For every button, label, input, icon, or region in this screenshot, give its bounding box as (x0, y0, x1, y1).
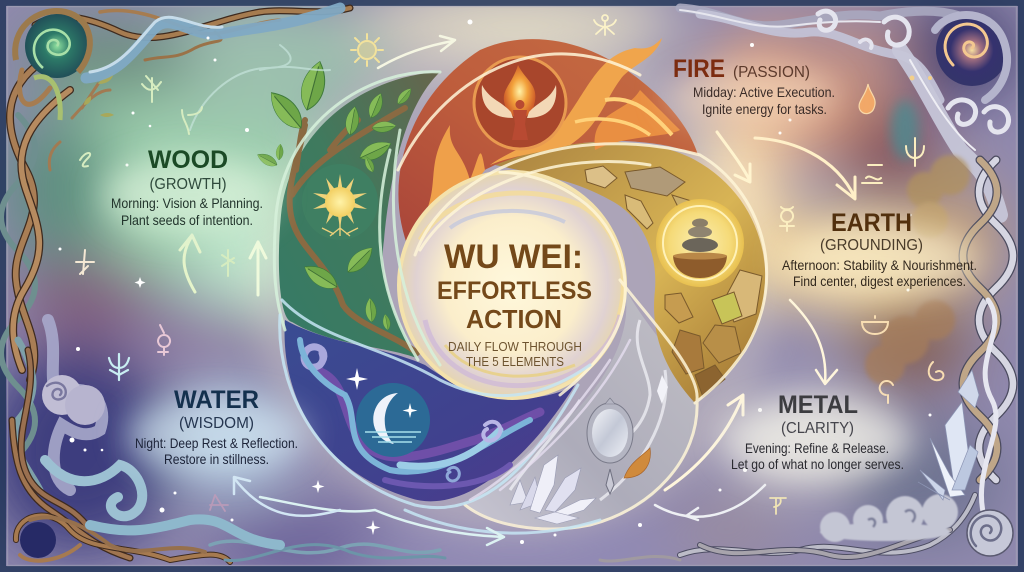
wood description (111, 195, 263, 228)
stars (58, 20, 932, 544)
cloud and wave, left side (42, 320, 280, 545)
metal wisps (510, 320, 666, 500)
clouds, bottom right (820, 494, 958, 542)
arrow: lower right wisp (655, 485, 765, 520)
border: top-left vine and blue ribbon (20, 8, 350, 104)
border: brown and blue vine braid, left side (1, 60, 130, 558)
icon: crystal cluster (510, 455, 596, 524)
label: earth (782, 209, 977, 289)
icon: stacked stones in bowl (656, 199, 744, 287)
wood subtitle: (GROWTH) (150, 176, 226, 193)
center subtitle (448, 340, 582, 369)
water description: Night: Deep Rest & Reflection. (135, 435, 298, 451)
flowing light ribbons (274, 54, 767, 533)
label: metal (731, 391, 904, 472)
water swirl ribbons (300, 340, 540, 486)
border: bottom-left spiral and brown braid (16, 516, 680, 562)
center swirl disc (399, 172, 625, 398)
arrow: metal to earth (665, 395, 743, 490)
wood description: Plant seeds of intention. (121, 212, 253, 228)
earth description: Afternoon: Stability & Nourishment. (782, 257, 977, 273)
panel: metal petal (465, 282, 697, 528)
water subtitle: (WISDOM) (179, 415, 254, 432)
rune: flame (859, 84, 875, 114)
metal description (731, 440, 904, 472)
fire description: Ignite energy for tasks. (702, 101, 827, 117)
metal description: Evening: Refine & Release. (745, 440, 889, 456)
arrow: metal to water bottom (260, 497, 504, 545)
arrow: fire to earth near disc (717, 132, 750, 182)
wood heading: WOOD (148, 146, 228, 174)
leaves on tree (255, 59, 414, 331)
metal heading: METAL (778, 391, 858, 419)
icon: falling leaf (624, 448, 650, 478)
label: wood (111, 146, 263, 228)
panel: wood petal (255, 59, 440, 358)
icon: sun medallion (302, 164, 378, 240)
center subtitle: THE 5 ELEMENTS (466, 355, 564, 369)
water heading: WATER (174, 386, 259, 414)
title line three: ACTION (466, 304, 562, 334)
border: grey and tan braid, right side (963, 160, 1013, 520)
panel: earth petal (495, 142, 765, 402)
panel: fire petal (398, 38, 698, 252)
arrow: earth to metal (790, 300, 837, 384)
earth description (782, 257, 977, 289)
arrow: wood up left (180, 235, 200, 292)
rune: right cluster (780, 138, 924, 231)
title line two: EFFORTLESS (437, 277, 592, 305)
fire heading: FIRE (673, 55, 725, 83)
nebula clouds, gold and brown, right side (865, 155, 970, 385)
flow arrows (180, 36, 855, 545)
arrow: water to wood (234, 477, 340, 516)
icon: quartz crystals, bottom right (918, 370, 979, 500)
water description (135, 435, 298, 467)
fire flames (425, 38, 680, 215)
arrow: wood to fire (378, 36, 455, 68)
metal description: Let go of what no longer serves. (731, 456, 904, 472)
earth stones (585, 166, 762, 397)
arrow: wood up right (250, 242, 266, 295)
rune: sun (351, 34, 383, 66)
icon: phoenix figure medallion (474, 57, 566, 149)
earth heading: EARTH (831, 209, 912, 237)
earth subtitle: (GROUNDING) (820, 237, 923, 254)
icon: hand mirror (587, 398, 633, 494)
label: fire (673, 55, 835, 117)
fire description (693, 84, 835, 117)
water description: Restore in stillness. (164, 451, 269, 467)
arrow: fire to earth outer (755, 138, 855, 199)
wood description: Morning: Vision & Planning. (111, 195, 263, 211)
rune: lower right (770, 498, 786, 514)
fire subtitle: (PASSION) (733, 64, 810, 81)
metal subtitle: (CLARITY) (781, 420, 854, 437)
rune: left cluster (158, 325, 170, 355)
rune: metal cluster (862, 316, 943, 403)
earth description: Find center, digest experiences. (793, 273, 966, 289)
label: water (135, 386, 298, 467)
mystic runes (76, 15, 943, 514)
center title (437, 238, 592, 369)
halo glow behind spiral (253, 33, 777, 537)
rune: wood cluster (80, 76, 234, 276)
rune: top centre (594, 15, 616, 35)
title line one: WU WEI: (444, 238, 583, 276)
wood tree trunk (290, 108, 417, 353)
soft glows behind labels (103, 65, 980, 478)
wisp: upper left aura (190, 45, 330, 130)
fire description: Midday: Active Execution. (693, 84, 835, 100)
border: bottom-right swirl and braid (680, 495, 1013, 557)
center subtitle: DAILY FLOW THROUGH (448, 340, 582, 354)
icon: green spiral corner (15, 11, 90, 120)
panel: water petal (285, 320, 575, 501)
border: grey swirl band and galaxy, top right (680, 8, 1009, 215)
icon: crescent moon medallion (356, 383, 430, 457)
